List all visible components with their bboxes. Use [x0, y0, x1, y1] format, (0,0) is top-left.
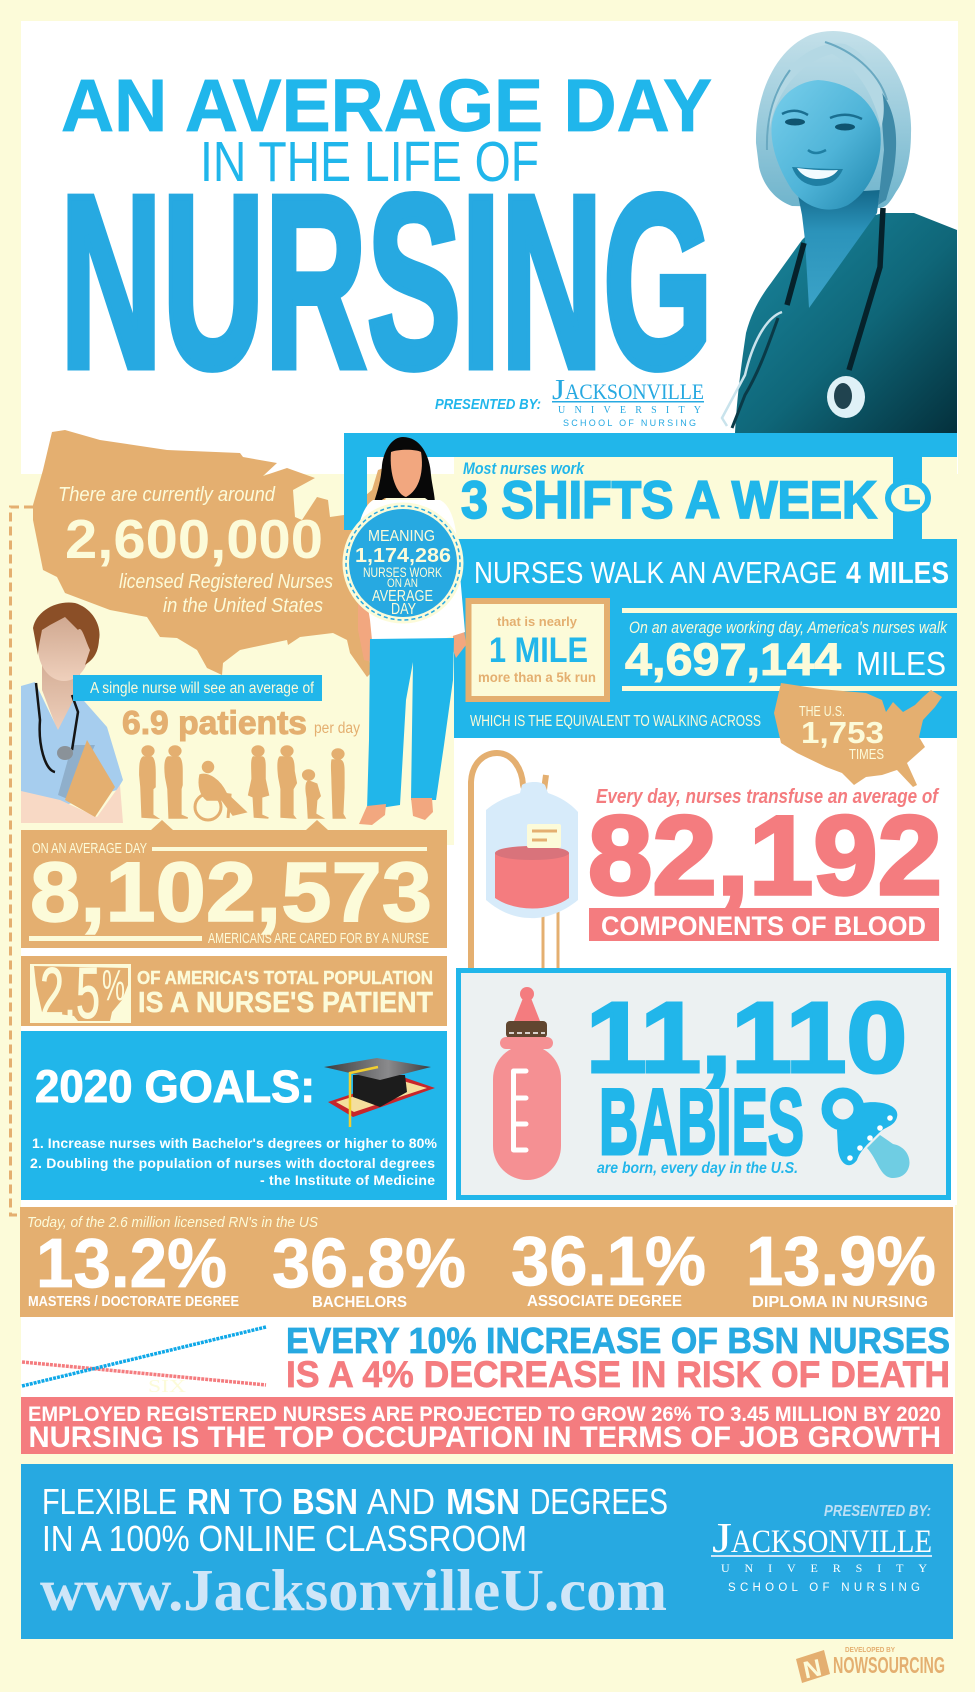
- hair shadow on right: [878, 90, 896, 205]
- icons: seven patients: [140, 746, 345, 820]
- three shifts a week: 3 SHIFTS A WEEK: [461, 471, 877, 530]
- face: [771, 80, 881, 210]
- share line one: OF AMERICA'S TOTAL POPULATION: [137, 967, 433, 988]
- photo: smiling nurse: [722, 31, 957, 433]
- panel: babies: [458, 970, 948, 1198]
- bag: [486, 782, 578, 918]
- logo university: UNIVERSITY: [558, 405, 701, 416]
- tubes: [543, 905, 558, 968]
- callout: single nurse patients: [73, 675, 322, 701]
- clock stem: [893, 457, 922, 539]
- stethoscope: [36, 683, 78, 772]
- footer logo university: UNIVERSITY: [721, 1561, 927, 1575]
- components bar: [589, 908, 939, 941]
- equivalent sentence: WHICH IS THE EQUIVALENT TO WALKING ACROSS: [470, 713, 761, 730]
- nurse count caption line one: licensed Registered Nurses: [119, 571, 333, 593]
- cared for count: 8,102,573: [30, 845, 432, 939]
- per day: per day: [314, 720, 360, 737]
- header presented by logo: [435, 375, 704, 428]
- logo mark: [796, 1650, 830, 1685]
- panel: job growth: [21, 1397, 953, 1454]
- patient six child: [303, 770, 322, 818]
- logo wordmark: ACKSONVILLE: [565, 379, 704, 404]
- smile: [792, 167, 843, 186]
- times: TIMES: [849, 747, 884, 763]
- inset map shape: [34, 966, 128, 1021]
- diploma label: DIPLOMA IN NURSING: [752, 1294, 928, 1311]
- badge: [342, 502, 464, 624]
- growth line two: NURSING IS THE TOP OCCUPATION IN TERMS OF JOB GROWTH: [28, 1421, 941, 1454]
- blood statistic: [588, 786, 942, 941]
- degrees line one: AND: [367, 1481, 435, 1522]
- one mile box: [468, 601, 607, 699]
- footer logo school: SCHOOL OF NURSING: [728, 1582, 920, 1594]
- babies caption: are born, every day in the U.S.: [597, 1160, 798, 1177]
- footer presented by: PRESENTED BY:: [824, 1503, 931, 1520]
- BSN line: EVERY 10% INCREASE OF BSN NURSES: [286, 1320, 950, 1361]
- title line one: AN AVERAGE DAY: [61, 64, 712, 147]
- shirt: [21, 682, 123, 805]
- associate label: ASSOCIATE DEGREE: [527, 1293, 682, 1310]
- average: AVERAGE: [372, 588, 433, 605]
- neck and chest: [798, 190, 880, 308]
- babies word: BABIES: [599, 1069, 804, 1174]
- times across: 1,753: [801, 715, 884, 750]
- hair: [373, 437, 435, 505]
- icon: graduation cap: [324, 1058, 435, 1127]
- one mile: 1 MILE: [489, 631, 588, 670]
- dashed connector: [10, 507, 33, 1215]
- title line two: IN THE LIFE OF: [200, 130, 539, 194]
- patient two: [165, 746, 188, 818]
- illustration: female nurse: [342, 437, 466, 825]
- the US: THE U.S.: [799, 704, 845, 720]
- back hair: [756, 31, 911, 208]
- transfuse count: 82,192: [588, 793, 942, 918]
- white lower-left panel: [21, 845, 454, 1205]
- nose: [808, 150, 826, 153]
- stethoscope chest piece: [827, 376, 865, 418]
- logo school of nursing: SCHOOL OF NURSING: [563, 418, 696, 428]
- degrees line one: [42, 1481, 668, 1522]
- fringe: [770, 43, 884, 128]
- logo: Nowsourcing: [796, 1645, 945, 1685]
- white header panel: [21, 21, 958, 474]
- faint label: SIX: [148, 1376, 186, 1396]
- more than a 5k run: more than a 5k run: [478, 669, 596, 685]
- patient seven: [332, 749, 345, 818]
- logo mark: N: [801, 1654, 824, 1685]
- scrubs: [735, 213, 957, 433]
- map inset: [30, 964, 131, 1023]
- patient four: [249, 746, 268, 818]
- total miles: 4,697,144: [625, 634, 841, 685]
- most nurses work: Most nurses work: [463, 459, 585, 478]
- walk headline: NURSES WALK AN AVERAGE: [474, 555, 837, 590]
- hair streaks: [767, 42, 887, 150]
- panel: left blue column: [344, 433, 367, 530]
- neck: [42, 650, 82, 732]
- face: [38, 615, 90, 681]
- walk headline value: 4 MILES: [846, 555, 949, 590]
- bachelors percent: 36.8%: [272, 1224, 466, 1302]
- degrees line one: MSN: [446, 1481, 520, 1522]
- nurse count: 2,600,000: [65, 508, 323, 570]
- degrees line one: DEGREES: [530, 1481, 668, 1522]
- diploma percent: 13.9%: [746, 1222, 936, 1300]
- patients figure: 6.9 patients: [122, 704, 307, 741]
- patient five: [278, 746, 296, 818]
- goals heading: 2020 GOALS:: [35, 1061, 315, 1112]
- map: United States large: [33, 430, 398, 677]
- bag label: [527, 824, 561, 848]
- cared for caption: AMERICANS ARE CARED FOR BY A NURSE: [208, 931, 429, 947]
- teeth: [797, 168, 838, 179]
- title: [60, 64, 713, 420]
- risk line: IS A 4% DECREASE IN RISK OF DEATH: [286, 1354, 950, 1395]
- map: United States small: [774, 683, 942, 787]
- patient three wheelchair: [195, 762, 246, 820]
- panel: shifts cream: [454, 457, 893, 539]
- panel: Americans cared for: [21, 820, 447, 948]
- footer logo wordmark: ACKSONVILLE: [731, 1524, 932, 1560]
- BSN statement: [286, 1320, 950, 1395]
- share line two: IS A NURSE'S PATIENT: [138, 987, 433, 1019]
- panel: 2020 goals: [21, 1031, 447, 1200]
- cream middle-left panel: [21, 474, 454, 845]
- panel: top blue band: [344, 433, 957, 457]
- degrees line one: FLEXIBLE: [42, 1481, 177, 1522]
- patient one: [140, 746, 157, 818]
- babies count: 11,110: [586, 982, 907, 1094]
- growth line one: EMPLOYED REGISTERED NURSES ARE PROJECTED TO GROW 26% TO 3.45 MILLION BY 2020: [28, 1403, 941, 1426]
- goal one: 1. Increase nurses with Bachelor's degrees or higher to 80%: [32, 1135, 438, 1151]
- callout text: A single nurse will see an average of: [90, 680, 315, 697]
- day: DAY: [391, 601, 416, 618]
- clipboard: [65, 740, 115, 817]
- logo initial: J: [552, 375, 565, 406]
- blood: [495, 853, 569, 908]
- arms: [358, 600, 466, 662]
- nurses per day: 1,174,286: [355, 544, 451, 567]
- degrees line one: RN: [187, 1481, 231, 1522]
- that is nearly: that is nearly: [497, 614, 578, 629]
- panel: shifts right cream: [922, 457, 957, 539]
- on an average day: ON AN AVERAGE DAY: [32, 841, 147, 857]
- degree intro: Today, of the 2.6 million licensed RN's in the US: [27, 1214, 318, 1231]
- share percent sign: %: [102, 961, 125, 1010]
- degrees line one: BSN: [292, 1481, 358, 1522]
- components label: COMPONENTS OF BLOOD: [601, 911, 926, 941]
- nurses work: NURSES WORK: [363, 564, 442, 580]
- illustration: blood bag: [471, 753, 578, 968]
- panel: degree breakdown: [20, 1207, 953, 1317]
- degrees line one: TO: [239, 1481, 283, 1522]
- face: [391, 450, 422, 497]
- illustration: male nurse: [21, 603, 123, 823]
- top: [357, 500, 465, 640]
- presented by label: PRESENTED BY:: [435, 396, 541, 413]
- bachelors label: BACHELORS: [312, 1294, 407, 1311]
- share value: 2.5: [40, 954, 100, 1034]
- shirt shadow: [58, 745, 95, 800]
- stethoscope tubes: [849, 208, 883, 370]
- iv stand: [471, 753, 546, 968]
- website: www.JacksonvilleU.com: [40, 1557, 667, 1623]
- on an: ON AN: [387, 576, 418, 590]
- eyes: [785, 118, 805, 126]
- goal source: - the Institute of Medicine: [260, 1172, 435, 1188]
- icon: clock: [888, 482, 928, 514]
- footer logo initial: J: [712, 1516, 732, 1562]
- panel: walking: [454, 539, 957, 738]
- panel: population share: [21, 954, 447, 1034]
- stethoscope head: [57, 746, 73, 760]
- white blood section panel: [454, 738, 957, 1205]
- feet: [359, 798, 433, 825]
- masters label: MASTERS / DOCTORATE DEGREE: [28, 1293, 239, 1310]
- forearm: [21, 785, 123, 823]
- icon: pacifier: [827, 1093, 910, 1178]
- degrees line two: IN A 100% ONLINE CLASSROOM: [42, 1518, 527, 1559]
- white strip panel: [21, 1205, 955, 1454]
- chart: BSN vs risk lines: [22, 1327, 266, 1396]
- associate percent: 36.1%: [511, 1222, 706, 1300]
- developed by: DEVELOPED BY: [845, 1645, 895, 1654]
- blood surface: [495, 846, 569, 860]
- nurse count intro: There are currently around: [58, 484, 276, 506]
- eyebrows: [782, 111, 862, 119]
- hair: [33, 603, 100, 665]
- meaning: MEANING: [368, 528, 435, 545]
- icon: baby bottle: [493, 987, 561, 1180]
- panel: footer call to action: [21, 1464, 953, 1639]
- shifts text: [461, 459, 877, 530]
- masters percent: 13.2%: [36, 1224, 227, 1302]
- miles unit: MILES: [856, 645, 946, 682]
- pants: [367, 638, 454, 810]
- goal two: 2. Doubling the population of nurses with doctoral degrees: [30, 1155, 435, 1171]
- nurse count caption line two: in the United States: [163, 595, 323, 617]
